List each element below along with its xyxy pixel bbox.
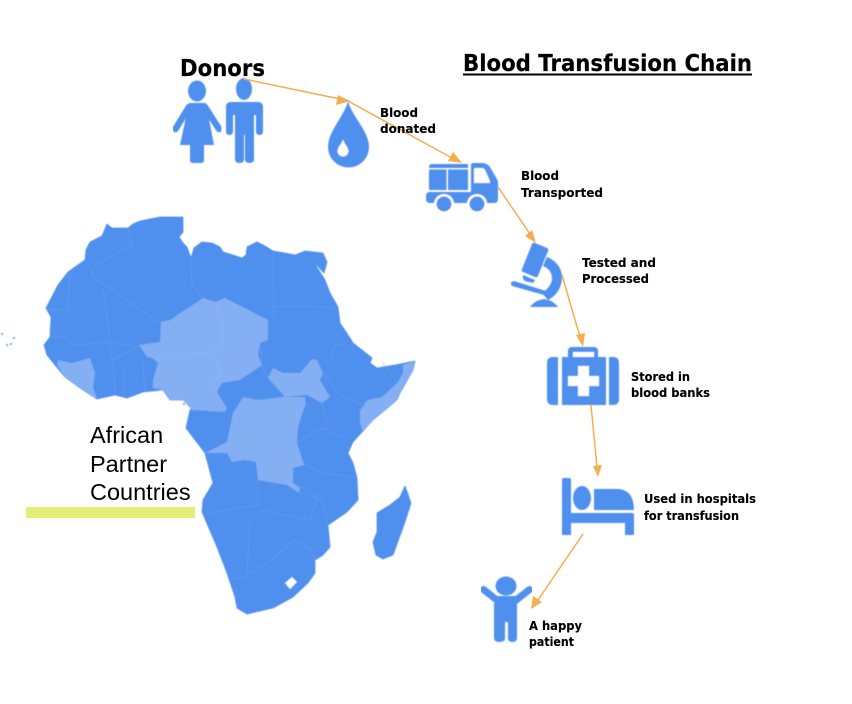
label: Stored in blood banks: Stored in	[631, 370, 690, 384]
map: Lesotho	[285, 577, 297, 589]
title: Blood Transfusion Chain	[463, 51, 752, 77]
map: Africa	[1, 217, 415, 614]
icon: man donor	[226, 78, 263, 163]
map: Cape Verde islands	[1, 333, 185, 405]
label: A happy patient	[529, 619, 582, 649]
label: Blood Transported	[521, 169, 603, 200]
icon: delivery truck	[426, 163, 498, 214]
map: Niger, Nigeria and Chad region	[139, 298, 268, 412]
icon: first aid case	[547, 347, 619, 405]
label: A happy patient: patient	[529, 635, 574, 649]
heading: Donors: Donors	[180, 56, 265, 82]
label: Used in hospitals for transfusion: for transfusion	[644, 509, 739, 523]
arrow: donors to blood	[244, 79, 350, 105]
caption: African Partner Countries: African	[90, 422, 163, 448]
label: Tested and Processed	[582, 256, 656, 286]
icon: hospital bed	[562, 478, 634, 535]
label: Stored in blood banks: blood banks	[631, 386, 710, 400]
label: A happy patient: A happy	[529, 619, 582, 633]
icon: microscope	[511, 243, 562, 307]
map: country borders	[46, 228, 398, 578]
arrow: bed to patient	[531, 534, 583, 609]
caption: African Partner Countries: Partner	[90, 451, 167, 477]
caption: African Partner Countries: Countries	[90, 479, 191, 505]
label: Tested and Processed: Tested and	[582, 256, 656, 270]
arrow: microscope to case	[562, 275, 585, 347]
label: Blood Transported: Blood	[521, 169, 559, 183]
label: Tested and Processed: Processed	[582, 272, 649, 286]
arrow: truck to microscope	[498, 187, 536, 243]
icon: blood drop	[328, 101, 369, 168]
map base: partner and non-partner countries	[44, 217, 415, 614]
label: Used in hospitals for transfusion: Used in hospitals	[644, 492, 756, 506]
map: South Sudan	[268, 359, 330, 403]
icon: happy patient	[484, 576, 530, 642]
legend bar	[26, 507, 195, 518]
label: Blood Transported: Transported	[521, 186, 603, 200]
label: Used in hospitals for transfusion	[644, 492, 756, 523]
label: Blood donated: donated	[380, 122, 436, 136]
map: Sierra Leone and Liberia region	[57, 358, 97, 399]
arrow: blood to truck	[348, 101, 462, 163]
map: Madagascar	[373, 486, 411, 559]
map: Democratic Republic of Congo	[205, 397, 306, 493]
caption: African Partner Countries	[90, 422, 191, 505]
label: Blood donated: Blood	[380, 106, 418, 120]
arrow: case to bed	[591, 405, 602, 477]
label: Blood donated	[380, 106, 436, 136]
arrows: chain flow	[244, 79, 602, 609]
icon: woman donor	[176, 80, 219, 163]
label: Stored in blood banks	[631, 370, 710, 400]
map: Somalia and Kenya coast	[360, 361, 415, 432]
